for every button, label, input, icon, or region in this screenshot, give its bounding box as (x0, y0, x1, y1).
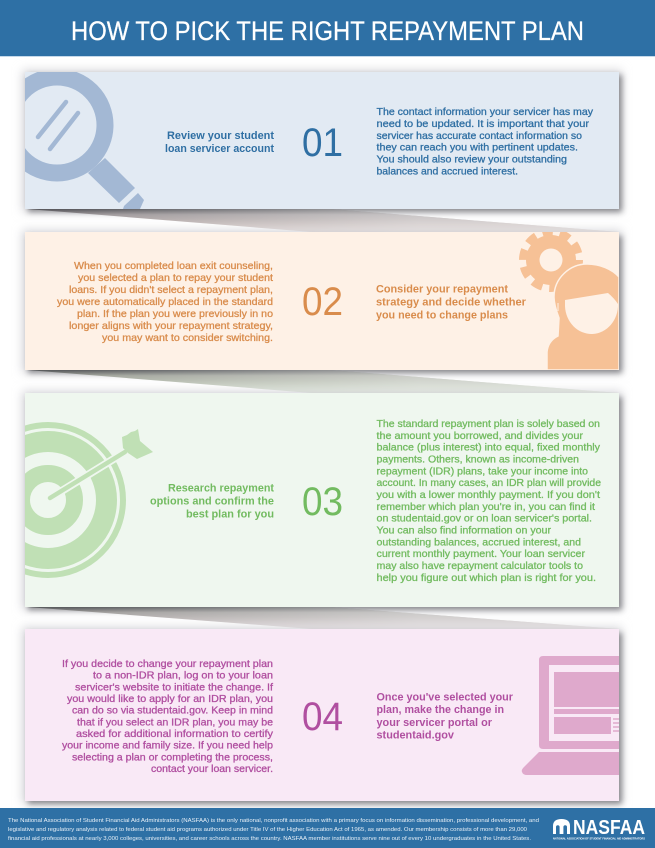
body text 3: the amount you borrowed, and divides your (376, 431, 584, 442)
icon: gear and person (523, 232, 619, 370)
body text 3: payments. Others, known as income-driven (376, 454, 579, 466)
body text 1: need to be updated. It is important that your (376, 119, 590, 130)
body text 4: that if you select an IDR plan, you may be (77, 717, 273, 728)
NASFAA logo: NASFAA (573, 816, 645, 839)
body text 1: The contact information your servicer has may (376, 107, 594, 118)
body text 4: If you decide to change your repayment plan (62, 659, 273, 670)
body text 2: you were automatically placed in the standard (57, 297, 273, 308)
body text 3: remember which plan you're in, you can find it (376, 502, 595, 513)
body text 4: servicer's website to initiate the change. If (75, 682, 273, 693)
body text 3: You can also find information on your (376, 526, 552, 536)
body text 2: When you completed loan exit counseling, (74, 261, 273, 272)
icon: target and arrow (25, 422, 153, 578)
body text 2: you may want to consider switching. (102, 333, 273, 344)
body text 3: repayment (IDR) plans, take your income into (376, 466, 588, 477)
heading 3: options and confirm the (150, 496, 274, 508)
body text 2 (57, 261, 273, 344)
body text 2: you selected a plan to repay your student (78, 273, 273, 284)
body text 3: The standard repayment plan is solely based on (376, 419, 600, 430)
body text 1: You should also review your outstanding (376, 154, 567, 166)
gear (523, 232, 579, 288)
heading 4: studentaid.gov (376, 730, 454, 742)
body text 4: selecting a plan or completing the process, (72, 752, 273, 763)
footer about text (8, 818, 539, 842)
heading 3: Research repayment (168, 482, 274, 494)
number 04: 04 (302, 695, 343, 739)
body text 4: your income and family size. If you need help (62, 741, 273, 752)
icon: magnifying glass (9, 77, 144, 209)
heading 4 (376, 692, 513, 742)
panel 1: review servicer account (9, 70, 622, 212)
body text 3: outstanding balances, accrued interest, and (376, 537, 581, 548)
footer about text: legislative and regulatory analysis related to federal student aid programs authorized under Title IV of the Higher Education Act of 1965, as amended. Our membership consists of more than 29,000 (8, 827, 527, 833)
heading 4: plan, make the change in (376, 704, 504, 716)
heading 2: you need to change plans (376, 310, 508, 322)
body text 2: longer aligns with your repayment strategy, (69, 321, 273, 332)
body text 3: help you figure out which plan is right for you. (376, 573, 596, 584)
person (547, 264, 619, 370)
body text 1: servicer has accurate contact information so (376, 131, 582, 142)
body text 3: account. In many cases, an IDR plan will provide (376, 478, 601, 489)
heading 2 (376, 284, 526, 322)
body text 3: may also have repayment calculator tools to (376, 561, 583, 572)
heading 3: best plan for you (186, 508, 274, 520)
heading 4: your servicer portal or (376, 717, 492, 729)
body text 1 (376, 107, 594, 177)
body text 4: contact your loan servicer. (151, 764, 273, 775)
body text 3: you with a lower monthly payment. If you don't (376, 490, 600, 501)
panel 2: consider repayment strategy (22, 230, 622, 373)
body text 3: on studentaid.gov or on loan servicer's portal. (376, 514, 592, 525)
body text 4: can do so via studentaid.gov. Keep in mind (72, 706, 273, 717)
icon: laptop (522, 656, 619, 775)
body text 4 (62, 659, 274, 775)
fold shadow between panels 2 and 3 (27, 370, 619, 393)
footer about text: financial aid professionals at nearly 3,000 colleges, universities, and career schools across the country. NASFAA member institutions serve nine out of every 10 undergraduates in the United States. (8, 836, 531, 842)
panel 4: make the change (22, 627, 622, 804)
heading 3 (150, 482, 274, 520)
body text 3: balance (plus interest) into equal, fixed monthly (376, 443, 601, 454)
heading 4: Once you've selected your (376, 692, 513, 704)
heading 1: Review your student (167, 130, 274, 142)
fold shadow between panels 1 and 2 (27, 209, 619, 232)
body text 2: plan. If the plan you were previously in no (77, 309, 273, 320)
body text 3: current monthly payment. Your loan servicer (376, 549, 586, 560)
body text 3 (376, 419, 601, 584)
body text 4: asked for additional information to certify (76, 729, 274, 740)
heading 1: loan servicer account (165, 143, 274, 155)
heading 2: Consider your repayment (376, 284, 508, 296)
footer about text: The National Association of Student Financial Aid Administrators (NASFAA) is the only national, nonprofit association with a primary focus on information dissemination, professional development, and (8, 818, 539, 824)
fold shadow between panels 3 and 4 (27, 607, 619, 629)
body text 4: to a non-IDR plan, log on to your loan (93, 671, 273, 682)
body text 2: loans. If you didn't select a repayment plan, (69, 285, 273, 296)
heading 1 (165, 130, 274, 155)
footer banner (0, 808, 655, 848)
title: HOW TO PICK THE RIGHT REPAYMENT PLAN (71, 16, 584, 46)
heading 2: strategy and decide whether (376, 296, 526, 308)
body text 4: you would like to apply for an IDR plan, you (67, 694, 273, 705)
number 01: 01 (302, 121, 343, 165)
header banner (0, 0, 655, 57)
NASFAA logo (553, 816, 645, 840)
number 03: 03 (302, 480, 343, 524)
body text 1: they can reach you with pertinent updates. (376, 143, 578, 154)
number 02: 02 (302, 280, 343, 324)
panel 3: research repayment options (0, 391, 622, 610)
body text 1: balances and accrued interest. (376, 166, 518, 177)
